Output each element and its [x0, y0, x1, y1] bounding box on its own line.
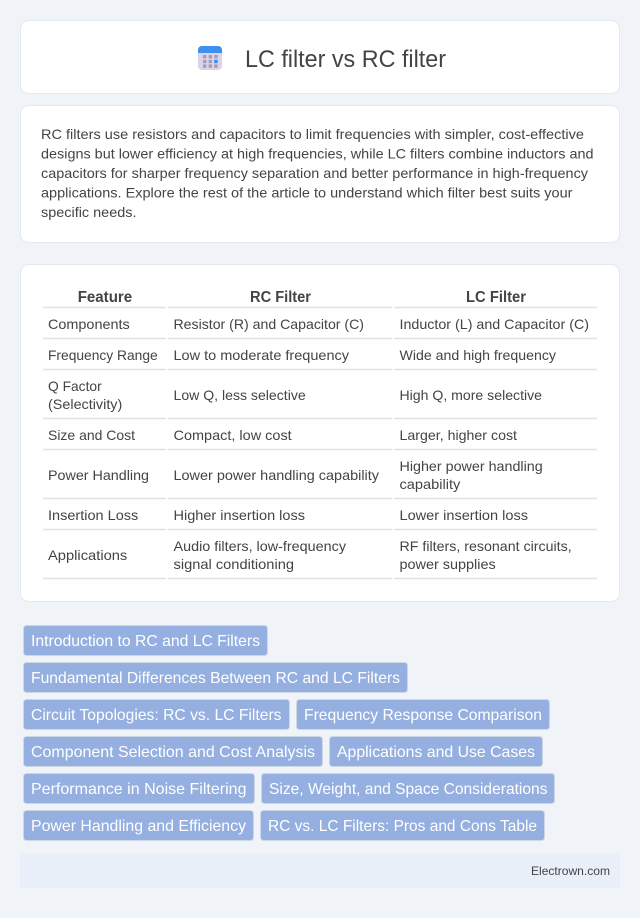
tag: power handling: Power Handling and Efficiency: [31, 818, 246, 835]
row: q factor: Q Factor: [48, 378, 102, 394]
header panel: [20, 20, 620, 94]
row: insertion loss: Lower insertion loss: [400, 507, 528, 523]
row: size and cost: Compact, low cost: [174, 427, 292, 443]
row: power handling: [48, 458, 543, 492]
tag: pros and cons: RC vs. LC Filters: Pros and Cons Table: [268, 818, 537, 835]
intro paragraph: applications. Explore the rest of the article to understand which filter best suits your: [41, 184, 573, 200]
intro paragraph: RC filters use resistors and capacitors to limit frequencies with simpler, cost-effective: [41, 126, 584, 142]
row: applications: RF filters, resonant circuits,: [400, 538, 572, 554]
row: size and cost: Larger, higher cost: [400, 427, 517, 443]
tag: applications: [330, 736, 542, 766]
tag: size weight space: [262, 774, 554, 804]
intro paragraph: designs but lower efficiency at high frequencies, while LC filters combine inductors and: [41, 146, 594, 162]
row: frequency range: Frequency Range: [48, 347, 158, 363]
row: q factor: Low Q, less selective: [174, 387, 306, 403]
row: components: Resistor (R) and Capacitor (C): [174, 316, 364, 332]
row: components: Inductor (L) and Capacitor (C): [400, 316, 589, 332]
table header: LC Filter: [466, 289, 526, 306]
row: size and cost: Size and Cost: [48, 427, 135, 443]
row: applications: Applications: [48, 547, 127, 563]
panel: topic tags: [24, 626, 554, 840]
row: power handling: Lower power handling capability: [174, 467, 379, 483]
row: insertion loss: Insertion Loss: [48, 507, 138, 523]
tag: frequency response: Frequency Response Comparison: [304, 707, 542, 724]
tag: size weight space: Size, Weight, and Space Considerations: [269, 781, 548, 798]
panel: comparison table: [20, 264, 620, 602]
row: q factor: [48, 378, 542, 412]
tag: circuit topologies: Circuit Topologies: RC vs. LC Filters: [31, 707, 282, 724]
table header: RC Filter: [250, 289, 311, 306]
row: insertion loss: Higher insertion loss: [174, 507, 305, 523]
row: components: [48, 316, 589, 332]
tag: introduction: [24, 626, 268, 656]
table header: Feature: [78, 289, 132, 306]
row: frequency range: Low to moderate frequency: [174, 347, 349, 363]
row: frequency range: Wide and high frequency: [400, 347, 556, 363]
tag: circuit topologies: [24, 700, 290, 730]
intro paragraph: specific needs.: [41, 204, 136, 220]
tag: noise filtering: [24, 774, 254, 804]
tag: noise filtering: Performance in Noise Filtering: [31, 781, 246, 798]
footer: Electrown.com: [531, 864, 610, 878]
tag: fundamental differences: [24, 662, 408, 692]
row: frequency range: [48, 347, 556, 363]
intro paragraph: capacitors for sharper frequency separation and better performance in high-frequency: [41, 165, 588, 181]
tag: component selection: [24, 736, 322, 766]
row: applications: power supplies: [400, 556, 496, 572]
tag: introduction: Introduction to RC and LC Filters: [31, 633, 260, 650]
row: power handling: Higher power handling: [400, 458, 543, 474]
tag: pros and cons: [260, 810, 544, 840]
row: power handling: Power Handling: [48, 467, 149, 483]
row: size and cost: [48, 427, 517, 443]
table header: [78, 289, 526, 306]
tag: power handling: [24, 810, 254, 840]
row: q factor: (Selectivity): [48, 396, 122, 412]
row: applications: signal conditioning: [174, 556, 294, 572]
intro paragraph: [41, 126, 594, 220]
row: components: Components: [48, 316, 130, 332]
row: applications: [48, 538, 572, 572]
panel: intro text: [20, 106, 620, 242]
row: q factor: High Q, more selective: [400, 387, 542, 403]
row: applications: Audio filters, low-frequency: [174, 538, 346, 554]
footer: [20, 854, 620, 888]
tag: applications: Applications and Use Cases: [337, 744, 535, 761]
tag: frequency response: [296, 700, 550, 730]
row: power handling: capability: [400, 476, 460, 492]
tag: component selection: Component Selection and Cost Analysis: [31, 744, 315, 761]
tag: fundamental differences: Fundamental Differences Between RC and LC Filters: [31, 670, 400, 687]
row: insertion loss: [48, 507, 528, 523]
title: LC filter vs RC filter: [245, 46, 446, 73]
icon: calendar grid: [198, 46, 222, 70]
